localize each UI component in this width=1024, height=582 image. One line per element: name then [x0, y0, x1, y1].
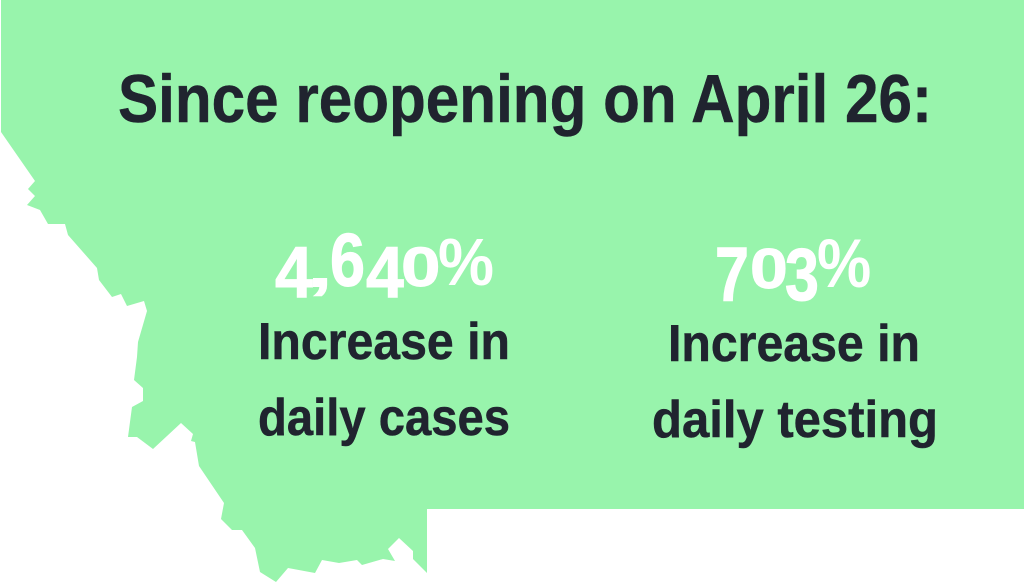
- number: 703%: %: [817, 224, 871, 302]
- stat: 703% daily testing: [652, 224, 938, 449]
- number: 4,640%: 4: [366, 232, 404, 312]
- number: 4,640%: 6: [330, 218, 365, 302]
- number: 703%: 0: [750, 237, 788, 301]
- label: Increase in daily testing: Increase in: [668, 315, 920, 373]
- number: 703%: 3: [785, 235, 819, 316]
- label: Increase in daily cases: [258, 313, 510, 447]
- label: Increase in daily cases: daily cases: [258, 389, 510, 447]
- label: Increase in daily cases: Increase in: [258, 313, 510, 371]
- number: 703%: [715, 224, 871, 318]
- number: 4,640%: [275, 218, 494, 312]
- number: 703%: 7: [715, 231, 749, 318]
- number: 4,640%: 0: [401, 235, 440, 298]
- stat: 4,640% daily cases: [258, 218, 510, 447]
- label: Increase in daily testing: daily testing: [652, 391, 938, 449]
- title: Since reopening on April 26:: [118, 61, 932, 137]
- number: 4,640%: %: [438, 224, 494, 299]
- number: 4,640%: 4: [275, 232, 313, 312]
- label: Increase in daily testing: [652, 315, 938, 449]
- number: 4,640%: ,: [306, 233, 334, 300]
